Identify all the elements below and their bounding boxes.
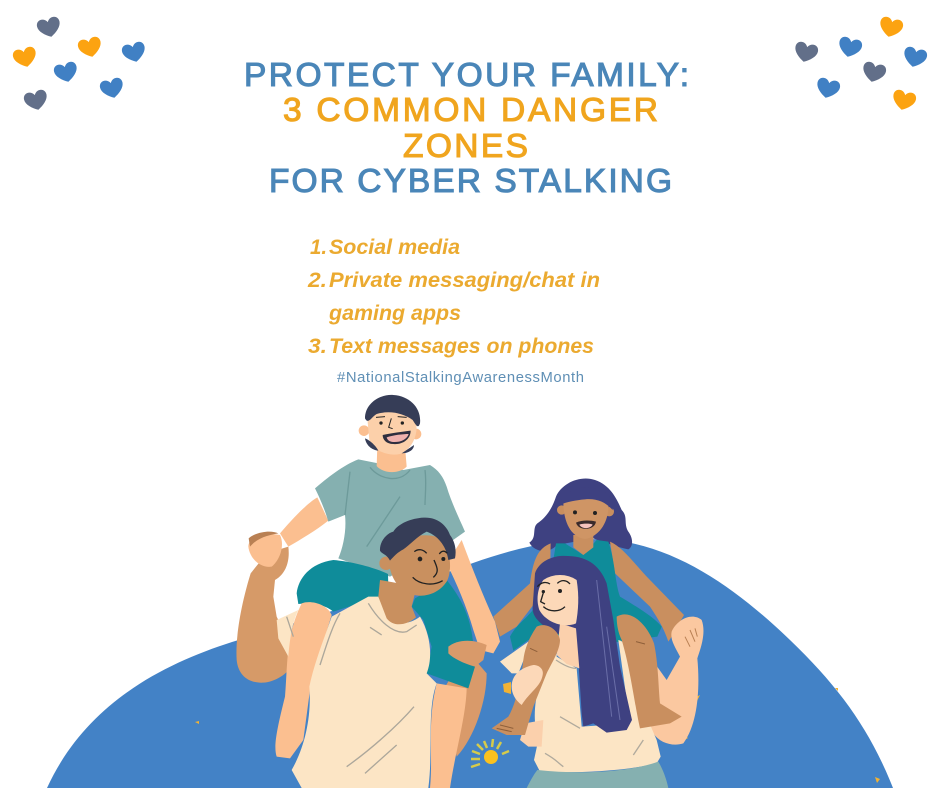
mother skirt [527,762,668,788]
numbered list of danger zones: 1. [310,236,327,259]
title: FOR CYBER STALKING [269,163,672,200]
son left shorts [297,560,388,612]
numbered list of danger zones [307,236,600,358]
numbered list of danger zones: Private messaging/chat in [329,269,600,292]
illustration: father carrying son [236,395,500,788]
mother head and long hair [533,556,632,733]
hearts: top right cluster [792,16,928,112]
father shirt [277,597,437,788]
mother lower arm behind foot [520,720,543,747]
father hand on son's leg [448,641,487,667]
mother raised arm [637,617,703,745]
daughter arms [493,542,684,642]
son neck and head [359,395,421,472]
son right shorts [412,580,475,688]
daughter hair back [529,479,632,551]
mother shirt [500,640,661,772]
numbered list of danger zones: Social media [329,236,460,259]
son right lower leg [430,683,467,788]
numbered list of danger zones: Text messages on phones [329,335,594,358]
title [244,57,689,200]
illustration: mother carrying daughter [492,479,703,788]
title: PROTECT YOUR FAMILY: [244,57,689,94]
hearts: top left cluster [12,16,148,112]
mother hand on daughter's shin [512,665,543,705]
numbered list of danger zones: 2. [307,269,327,292]
father neck and head [378,518,456,624]
numbered list of danger zones: 3. [308,335,327,358]
daughter legs [492,614,682,735]
illustration: sun icon [471,739,509,767]
title: ZONES [403,128,528,165]
son shirt [315,459,465,577]
son left leg [275,602,332,758]
daughter dress [510,540,662,651]
hashtag: #NationalStalkingAwarenessMonth [337,370,584,386]
son right arm and hand [447,540,500,653]
daughter head [557,487,614,555]
father other forearm behind son [443,650,487,757]
title: 3 COMMON DANGER [283,92,658,129]
numbered list of danger zones: gaming apps [328,302,461,325]
blue hill background [47,539,893,788]
father raised arm and son's arm [236,497,328,683]
